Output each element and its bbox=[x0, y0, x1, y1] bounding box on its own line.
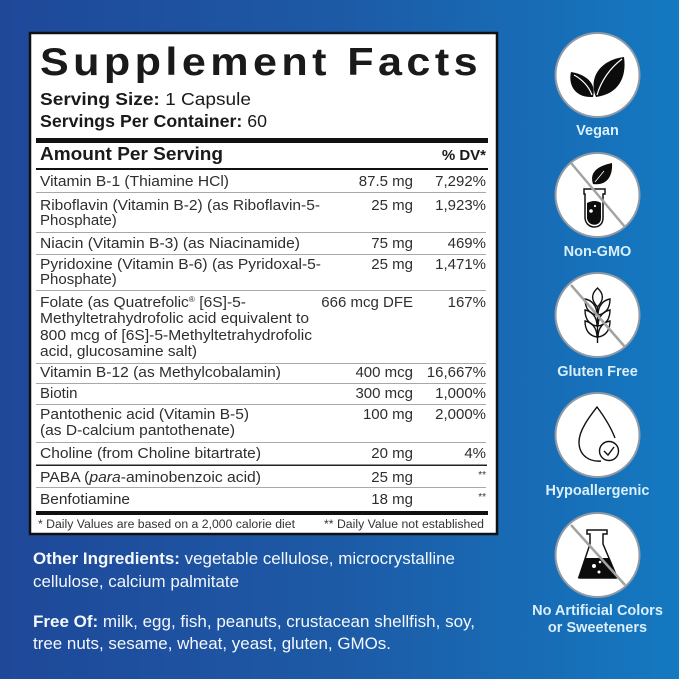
icon: flask bbox=[579, 530, 617, 578]
row: pyridoxine: 1,471% bbox=[435, 256, 486, 273]
row: folate: Folate (as Quatrefolic bbox=[40, 294, 183, 311]
row: folate: 167% bbox=[448, 294, 486, 311]
row: benfotiamine bbox=[40, 491, 486, 508]
row: pantothenic acid: 100 mg bbox=[363, 406, 413, 423]
no symbol slash bbox=[571, 163, 625, 227]
free of text bbox=[33, 612, 475, 653]
row: niacin: 469% bbox=[448, 235, 486, 252]
row: niacin: Niacin (Vitamin B-3) (as Niacinamide) bbox=[40, 235, 300, 252]
badge: hypoallergenic bbox=[546, 393, 649, 499]
row: vitamin B-1 bbox=[40, 173, 486, 190]
icon: test tube with leaf bbox=[584, 163, 612, 227]
row: riboflavin: 1,923% bbox=[435, 197, 486, 214]
row: pyridoxine: Pyridoxine (Vitamin B-6) (as Pyridoxal-5- bbox=[40, 256, 321, 273]
free of text: Free Of: milk, egg, fish, peanuts, crustacean shellfish, soy, bbox=[33, 612, 475, 631]
table header: % DV* bbox=[442, 147, 486, 164]
row: pantothenic acid: Pantothenic acid (Vitamin B-5) bbox=[40, 406, 249, 423]
label: Hypoallergenic bbox=[546, 483, 649, 499]
row: choline bbox=[40, 445, 486, 462]
panel: supplement facts bbox=[30, 33, 497, 534]
serving info: Servings Per Container: 60 bbox=[40, 111, 267, 131]
row: choline: Choline (from Choline bitartrate) bbox=[40, 445, 261, 462]
row: biotin: 1,000% bbox=[435, 385, 486, 402]
label: or Sweeteners bbox=[548, 620, 647, 636]
row: riboflavin bbox=[40, 197, 486, 229]
no symbol slash bbox=[571, 525, 625, 585]
row: PABA: ** bbox=[478, 470, 486, 481]
row: folate bbox=[40, 294, 486, 360]
row: vitamin B-1: Vitamin B-1 (Thiamine HCl) bbox=[40, 173, 229, 190]
row: folate: [6S]-5- bbox=[195, 294, 246, 311]
row: folate: 800 mcg of [6S]-5-Methyltetrahydrofolic bbox=[40, 327, 313, 344]
row: vitamin B-12 bbox=[40, 364, 486, 381]
row: PABA: 25 mg bbox=[371, 469, 413, 486]
table header: Amount Per Serving bbox=[40, 144, 223, 164]
icon: drop with check bbox=[579, 407, 618, 461]
table rows bbox=[36, 173, 487, 508]
row: pyridoxine bbox=[40, 256, 486, 288]
other ingredients text bbox=[33, 549, 455, 591]
row: vitamin B-12: 16,667% bbox=[427, 364, 486, 381]
badge: no artificial colors or sweeteners bbox=[532, 513, 663, 636]
row: niacin: 75 mg bbox=[371, 235, 413, 252]
icon: wheat bbox=[585, 288, 610, 343]
row: folate: 666 mcg DFE bbox=[321, 294, 413, 311]
row: benfotiamine: Benfotiamine bbox=[40, 491, 130, 508]
row: folate: Methyltetrahydrofolic acid equivalent to bbox=[40, 310, 309, 327]
row: PABA bbox=[40, 469, 486, 486]
icon: leaves bbox=[570, 57, 625, 97]
row: choline: 4% bbox=[464, 445, 486, 462]
footnotes: ** Daily Value not established bbox=[324, 519, 484, 531]
row: PABA: PABA (para-aminobenzoic acid) bbox=[40, 469, 261, 486]
label: No Artificial Colors bbox=[532, 603, 663, 619]
label: Non-GMO bbox=[564, 244, 631, 260]
badge: gluten free bbox=[556, 273, 640, 380]
row: vitamin B-1: 7,292% bbox=[435, 173, 486, 190]
row: folate: acid, glucosamine salt) bbox=[40, 343, 197, 360]
badge: vegan bbox=[556, 33, 640, 139]
footnotes bbox=[38, 519, 484, 531]
row: vitamin B-12: Vitamin B-12 (as Methylcobalamin) bbox=[40, 364, 281, 381]
row: pantothenic acid: (as D-calcium pantothenate) bbox=[40, 422, 235, 439]
row: biotin bbox=[40, 385, 486, 402]
row: riboflavin: 25 mg bbox=[371, 197, 413, 214]
label: Vegan bbox=[576, 123, 619, 139]
serving info bbox=[40, 89, 267, 131]
label: Gluten Free bbox=[557, 364, 638, 380]
title: Supplement Facts bbox=[40, 41, 482, 84]
row: biotin: Biotin bbox=[40, 385, 78, 402]
row: pyridoxine: 25 mg bbox=[371, 256, 413, 273]
row: pantothenic acid bbox=[40, 406, 486, 439]
row: riboflavin: Phosphate) bbox=[40, 212, 117, 229]
table header bbox=[40, 144, 486, 164]
row: vitamin B-12: 400 mcg bbox=[355, 364, 413, 381]
row: choline: 20 mg bbox=[371, 445, 413, 462]
row: benfotiamine: 18 mg bbox=[371, 491, 413, 508]
badge: non-GMO bbox=[556, 153, 640, 260]
row: vitamin B-1: 87.5 mg bbox=[359, 173, 413, 190]
serving info: Serving Size: 1 Capsule bbox=[40, 89, 251, 109]
footnotes: * Daily Values are based on a 2,000 calorie diet bbox=[38, 519, 296, 531]
row: folate: ® bbox=[189, 295, 195, 304]
free of text: tree nuts, sesame, wheat, yeast, gluten, GMOs. bbox=[33, 634, 391, 653]
other ingredients text: cellulose, calcium palmitate bbox=[33, 572, 239, 591]
row: pantothenic acid: 2,000% bbox=[435, 406, 486, 423]
row: niacin bbox=[40, 235, 486, 252]
no symbol slash bbox=[571, 285, 625, 347]
label bbox=[532, 603, 663, 636]
row: pyridoxine: Phosphate) bbox=[40, 271, 117, 288]
row: biotin: 300 mcg bbox=[355, 385, 413, 402]
row: riboflavin: Riboflavin (Vitamin B-2) (as Riboflavin-5- bbox=[40, 197, 320, 214]
row: benfotiamine: ** bbox=[478, 492, 486, 503]
other ingredients text: Other Ingredients: vegetable cellulose, microcrystalline bbox=[33, 549, 455, 568]
thick divider bbox=[36, 138, 488, 143]
